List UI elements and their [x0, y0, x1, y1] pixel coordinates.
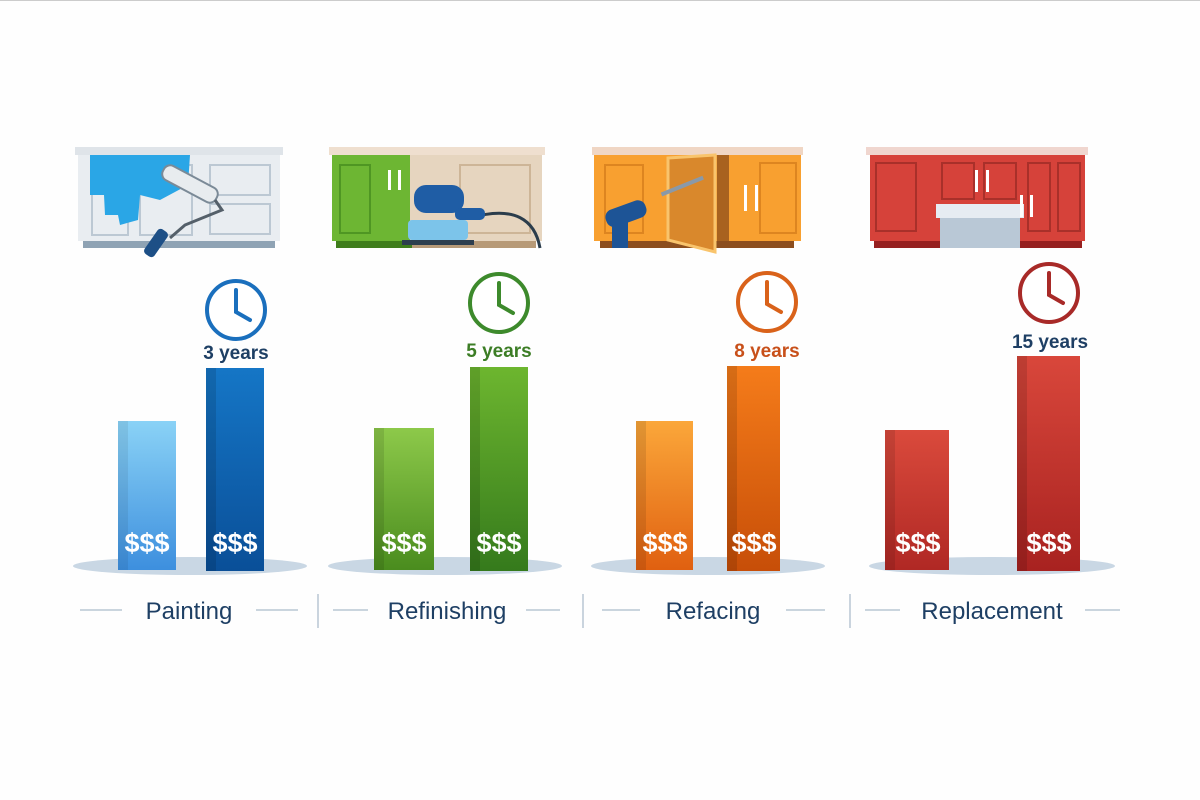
bar chart: refinishing: $$$ — [476, 528, 522, 558]
label: Replacement: Replacement — [921, 598, 1063, 625]
bar chart: refinishing — [328, 367, 562, 575]
bar chart: painting: $$$ — [124, 528, 170, 558]
bar chart: refinishing: $$$ — [381, 528, 427, 558]
icon: clock red — [1020, 264, 1078, 322]
label: 5 years: 5 years — [466, 341, 532, 362]
icon: white cabinet with paint roller — [75, 147, 283, 259]
icon: red cabinet — [866, 147, 1088, 248]
label: Refacing: Refacing — [666, 598, 760, 625]
panel: painting — [73, 147, 307, 575]
icon: clock orange — [738, 273, 796, 331]
icon: orange cabinet with drill — [592, 147, 803, 252]
bar chart: refacing: $$$ — [642, 528, 688, 558]
icon: clock blue — [207, 281, 265, 339]
bar chart: refacing — [591, 366, 825, 575]
label: 15 years: 15 years — [1012, 332, 1088, 353]
label: 8 years: 8 years — [734, 341, 800, 362]
panel: refacing — [591, 147, 825, 575]
bar chart: replacement: $$$ — [895, 528, 941, 558]
bar chart: refacing: $$$ — [731, 528, 777, 558]
label: Painting: Painting — [146, 598, 232, 625]
panel: refinishing — [328, 147, 562, 575]
bar chart: painting — [73, 368, 307, 575]
category labels — [80, 594, 1120, 628]
icon: green cabinet with sander — [329, 147, 545, 248]
bar chart: painting: $$$ — [212, 528, 258, 558]
label: Refinishing: Refinishing — [388, 598, 506, 625]
bar chart: replacement: $$$ — [1026, 528, 1072, 558]
bar chart: replacement — [869, 356, 1115, 575]
icon: clock green — [470, 274, 528, 332]
panel: replacement — [866, 147, 1115, 575]
label: 3 years: 3 years — [203, 343, 269, 364]
